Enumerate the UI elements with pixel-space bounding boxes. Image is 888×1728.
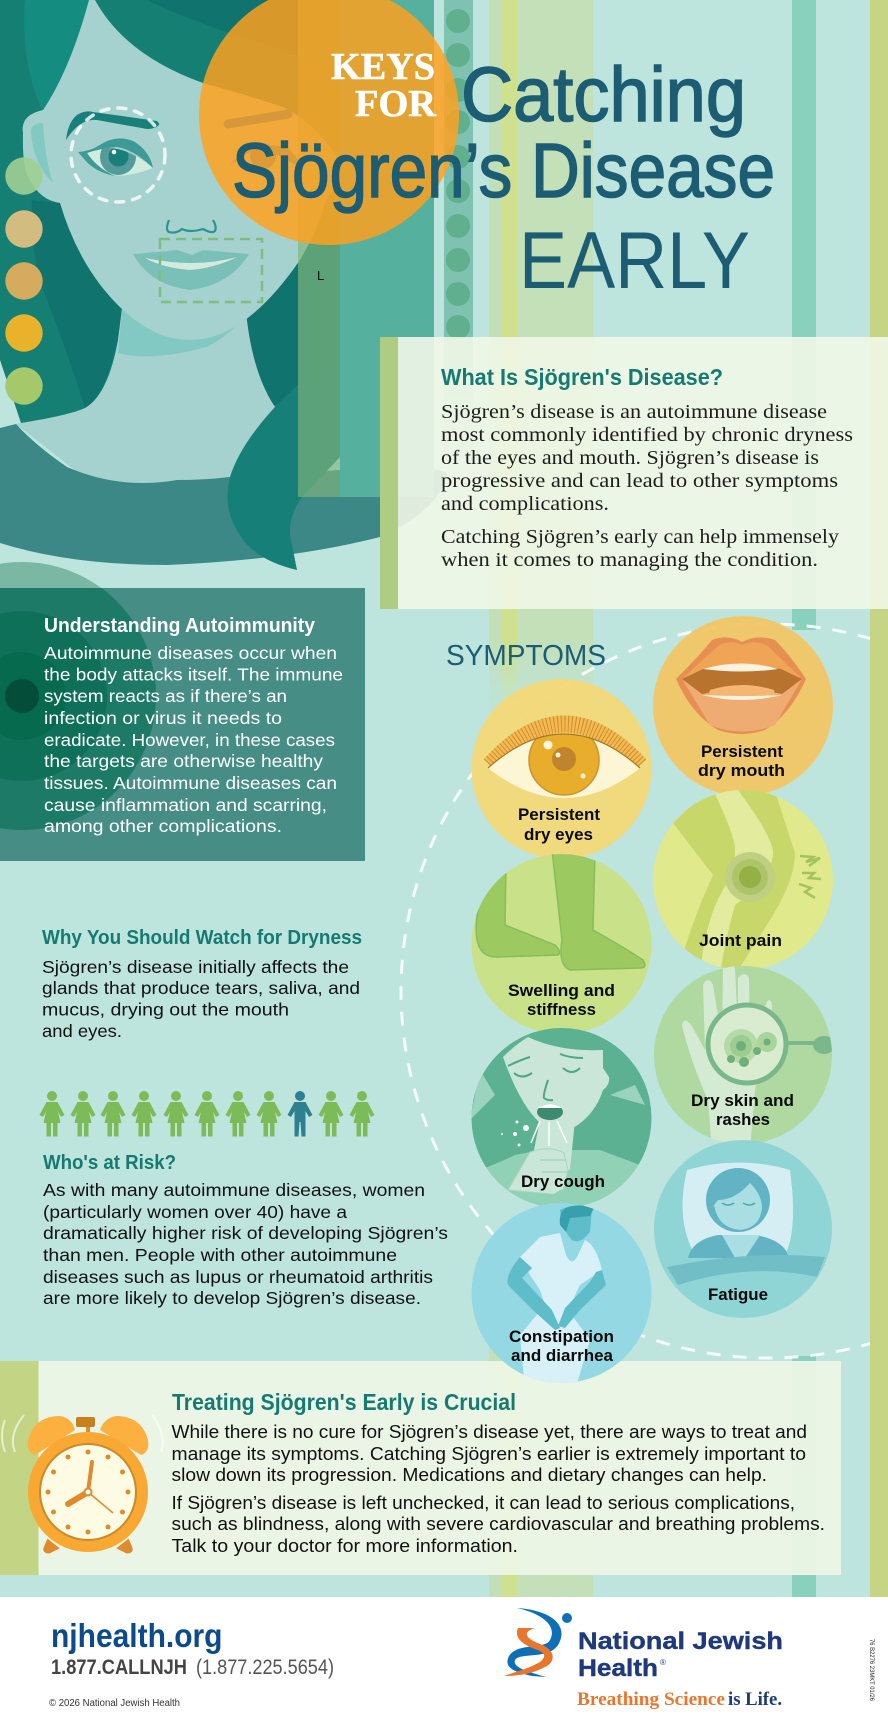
body text: among other complications. bbox=[44, 816, 282, 836]
shirt bbox=[0, 424, 447, 565]
body text: (particularly women over 40) have a bbox=[43, 1202, 347, 1222]
stray letter: L bbox=[317, 268, 324, 283]
body text: the targets are otherwise healthy bbox=[44, 751, 323, 771]
body text bbox=[44, 643, 343, 836]
body text: most commonly identified by chronic dryness bbox=[441, 424, 853, 446]
icon: sleeping person bbox=[667, 1162, 825, 1285]
panel: understanding autoimmunity bbox=[0, 562, 365, 861]
label bbox=[698, 743, 785, 780]
left eyebrow bbox=[66, 111, 159, 140]
keys for: KEYS bbox=[331, 46, 435, 88]
section: why watch for dryness bbox=[42, 927, 362, 1041]
label: dry mouth bbox=[698, 762, 785, 780]
print code: 76 B2276 23MKT 01/26 bbox=[868, 1639, 875, 1701]
heading: Understanding Autoimmunity bbox=[44, 614, 316, 637]
right edge stripe bbox=[870, 0, 888, 1597]
body text: manage its symptoms. Catching Sjögren’s earlier is extremely important to bbox=[172, 1443, 806, 1464]
footer bbox=[0, 1597, 888, 1728]
icon: feet bbox=[470, 850, 645, 970]
symptom: swelling and stiffness bbox=[470, 850, 652, 1034]
symptom: dry eyes bbox=[472, 679, 652, 859]
body text: Catching Sjögren’s early can help immensely bbox=[441, 526, 839, 548]
body text: dramatically higher risk of developing Sjögren’s bbox=[43, 1223, 448, 1243]
label bbox=[691, 1092, 794, 1129]
label: and diarrhea bbox=[511, 1347, 614, 1365]
left eye bbox=[78, 138, 153, 176]
logo wordmark bbox=[578, 1628, 783, 1682]
label: Joint pain bbox=[699, 932, 782, 950]
Sjögren's Disease: Sjögren’s Disease bbox=[232, 128, 775, 214]
orange circle bbox=[199, 0, 459, 245]
website: njhealth.org bbox=[51, 1617, 222, 1654]
symptom: dry cough bbox=[470, 1028, 652, 1220]
body text: eradicate. However, in these cases bbox=[44, 730, 335, 750]
label: Persistent bbox=[518, 806, 601, 824]
body text: slow down its progression. Medications and dietary changes can help. bbox=[172, 1464, 767, 1485]
title bbox=[232, 46, 775, 306]
dashed circle bbox=[401, 624, 888, 1358]
label: rashes bbox=[716, 1111, 770, 1129]
section: who's at risk bbox=[43, 1152, 448, 1308]
logo wordmark: Health bbox=[578, 1655, 658, 1682]
label: Dry cough bbox=[521, 1173, 605, 1191]
body text: As with many autoimmune diseases, women bbox=[43, 1180, 425, 1200]
phone: (1.877.225.5654) bbox=[196, 1656, 334, 1679]
icon: alarm clock bbox=[2, 1415, 163, 1552]
body text: While there is no cure for Sjögren’s disease yet, there are ways to treat and bbox=[172, 1421, 807, 1442]
symptom: dry skin and rashes bbox=[654, 963, 835, 1150]
body text: Talk to your doctor for more information. bbox=[172, 1535, 518, 1556]
early: EARLY bbox=[519, 216, 750, 306]
dotted stripe bbox=[446, 9, 470, 339]
label: stiffness bbox=[527, 1001, 596, 1019]
body text: of the eyes and mouth. Sjögren’s disease is bbox=[441, 447, 819, 469]
keys for bbox=[331, 46, 437, 125]
symptom: fatigue bbox=[654, 1140, 832, 1318]
tagline: is Life. bbox=[728, 1689, 782, 1710]
nose bbox=[167, 220, 216, 233]
illustration: woman's face bbox=[0, 0, 447, 570]
symptom: constipation and diarrhea bbox=[472, 1203, 652, 1390]
hair lock bbox=[228, 343, 340, 570]
body text bbox=[172, 1421, 825, 1556]
label: Dry skin and bbox=[691, 1092, 794, 1110]
green and teal blocks bbox=[298, 0, 340, 497]
body text: cause inflammation and scarring, bbox=[44, 795, 327, 815]
label: Swelling and bbox=[508, 982, 615, 1000]
dashed mouth box bbox=[160, 239, 262, 302]
dashed eye circle bbox=[71, 108, 165, 202]
label: Fatigue bbox=[708, 1286, 768, 1304]
icon: lips bbox=[676, 637, 806, 734]
body text: when it comes to managing the condition. bbox=[441, 549, 818, 571]
body text: mucus, drying out the mouth bbox=[42, 1000, 289, 1020]
body text: Autoimmune diseases occur when bbox=[44, 643, 337, 663]
icon: coughing woman bbox=[472, 1037, 645, 1206]
body text: the body attacks itself. The immune bbox=[44, 665, 343, 685]
label bbox=[508, 982, 615, 1019]
phone bbox=[51, 1656, 334, 1679]
body text bbox=[43, 1180, 448, 1308]
heading: What Is Sjögren's Disease? bbox=[441, 364, 723, 390]
catching: Catching bbox=[461, 52, 746, 138]
keys for: FOR bbox=[355, 83, 437, 125]
body text: such as blindness, along with severe cardiovascular and breathing problems. bbox=[172, 1513, 825, 1534]
body text: If Sjögren’s disease is left unchecked, it can lead to serious complications, bbox=[172, 1492, 795, 1513]
body text: system reacts as if there’s an bbox=[44, 686, 287, 706]
icon: knee bbox=[673, 785, 821, 975]
logo wordmark: National Jewish bbox=[578, 1628, 783, 1655]
body text: progressive and can lead to other symptoms bbox=[441, 470, 838, 492]
body text: are more likely to develop Sjögren’s disease. bbox=[43, 1288, 421, 1308]
phone: 1.877.CALLNJH bbox=[51, 1656, 187, 1679]
face shape bbox=[23, 0, 345, 340]
tagline: Breathing Science bbox=[577, 1689, 725, 1710]
right eye and brow seen through the circle bbox=[228, 114, 302, 170]
lips bbox=[133, 250, 249, 290]
panel: what is Sjögren's disease bbox=[380, 337, 888, 609]
body text bbox=[42, 957, 360, 1041]
body text: and eyes. bbox=[42, 1021, 122, 1041]
body text: and complications. bbox=[441, 493, 609, 515]
panel: treating early bbox=[0, 1361, 841, 1575]
body text: glands that produce tears, saliva, and bbox=[42, 978, 360, 998]
body text: than men. People with other autoimmune bbox=[43, 1245, 397, 1265]
icon: eye bbox=[488, 724, 640, 798]
icon: person with stomach pain bbox=[508, 1205, 606, 1390]
pictogram: one man among women bbox=[40, 1091, 374, 1136]
label: Persistent bbox=[701, 743, 784, 761]
symptom: dry mouth bbox=[653, 616, 833, 796]
body text: Sjögren’s disease is an autoimmune disease bbox=[441, 401, 827, 423]
earrings bbox=[5, 157, 43, 405]
copyright: © 2026 National Jewish Health bbox=[49, 1698, 180, 1709]
label: Constipation bbox=[509, 1328, 614, 1346]
body text bbox=[441, 401, 853, 571]
heading: Who's at Risk? bbox=[43, 1152, 176, 1174]
heading: symptoms: SYMPTOMS bbox=[446, 640, 606, 672]
heading: Why You Should Watch for Dryness bbox=[42, 927, 362, 949]
icon: hand and magnifier bbox=[682, 963, 835, 1150]
background stripes bbox=[444, 0, 825, 1597]
label bbox=[509, 1328, 614, 1365]
logo mark bbox=[504, 1608, 572, 1677]
body text: diseases such as lupus or rheumatoid arthritis bbox=[43, 1267, 433, 1287]
body text: infection or virus it needs to bbox=[44, 708, 282, 728]
label bbox=[518, 806, 601, 844]
body text: Sjögren’s disease initially affects the bbox=[42, 957, 349, 977]
body text: tissues. Autoimmune diseases can bbox=[44, 773, 337, 793]
logo wordmark: ® bbox=[660, 1658, 666, 1667]
heading: Treating Sjögren's Early is Crucial bbox=[172, 1389, 516, 1415]
label: dry eyes bbox=[524, 826, 593, 844]
symptom: joint pain bbox=[653, 785, 833, 975]
